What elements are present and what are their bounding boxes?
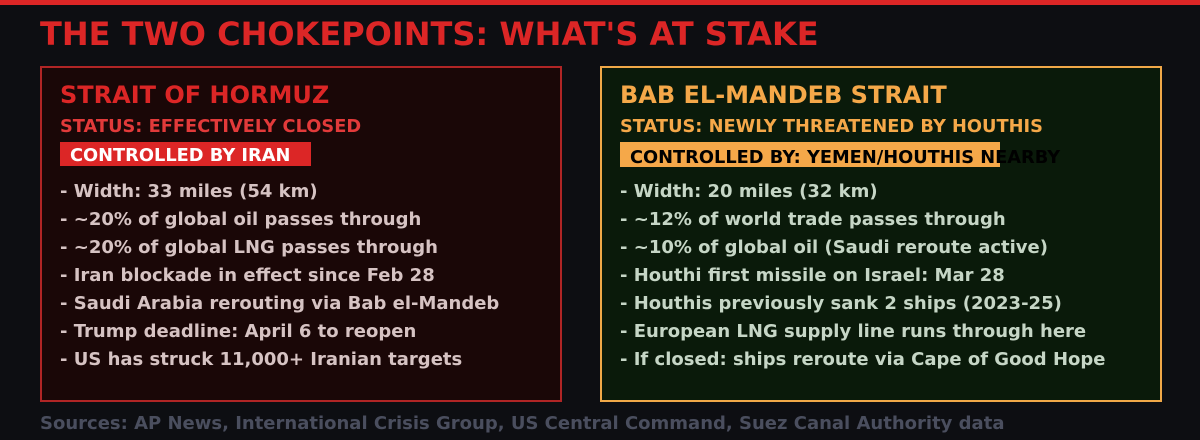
bullet list: Bab el-Mandeb facts — [620, 181, 1105, 370]
heading: Bab el-Mandeb: BAB EL-MANDEB STRAIT — [620, 81, 947, 109]
bullet list: Hormuz facts: - Trump deadline: April 6 to reopen — [60, 321, 416, 342]
bullet list: Bab el-Mandeb facts: - Houthis previously sank 2 ships (2023-25) — [620, 293, 1062, 314]
bullet list: Bab el-Mandeb facts: - If closed: ships reroute via Cape of Good Hope — [620, 349, 1105, 370]
panel: Bab el-Mandeb — [600, 66, 1162, 402]
bullet list: Hormuz facts: - Saudi Arabia rerouting via Bab el-Mandeb — [60, 293, 499, 314]
panel: Strait of Hormuz — [40, 66, 562, 402]
bullet list: Hormuz facts: - ~20% of global LNG passes through — [60, 237, 438, 258]
bullet list: Bab el-Mandeb facts: - ~12% of world trade passes through — [620, 209, 1006, 230]
bullet list: Hormuz facts: - US has struck 11,000+ Iranian targets — [60, 349, 462, 370]
top accent bar — [0, 0, 1200, 5]
bullet list: Bab el-Mandeb facts: - Houthi first missile on Israel: Mar 28 — [620, 265, 1005, 286]
panel: Bab el-Mandeb: CONTROLLED BY: YEMEN/HOUTHIS NEARBY — [630, 147, 1060, 168]
sources footer: Sources: AP News, International Crisis Group, US Central Command, Suez Canal Authority data — [40, 413, 1004, 434]
badge: controlled by Yemen/Houthis — [620, 142, 1000, 167]
bullet list: Hormuz facts — [60, 181, 499, 370]
bullet list: Bab el-Mandeb facts: - ~10% of global oil (Saudi reroute active) — [620, 237, 1048, 258]
badge: controlled by Iran: CONTROLLED BY IRAN — [70, 145, 290, 166]
bullet list: Hormuz facts: - Width: 33 miles (54 km) — [60, 181, 318, 202]
bullet list: Bab el-Mandeb facts: - European LNG supply line runs through here — [620, 321, 1086, 342]
heading: Hormuz: STRAIT OF HORMUZ — [60, 81, 329, 109]
bullet list: Hormuz facts: - Iran blockade in effect since Feb 28 — [60, 265, 435, 286]
title: THE TWO CHOKEPOINTS: WHAT'S AT STAKE — [40, 15, 819, 53]
bullet list: Hormuz facts: - ~20% of global oil passes through — [60, 209, 421, 230]
bullet list: Bab el-Mandeb facts: - Width: 20 miles (32 km) — [620, 181, 878, 202]
status: Bab el-Mandeb: STATUS: NEWLY THREATENED BY HOUTHIS — [620, 116, 1043, 137]
status: Hormuz: STATUS: EFFECTIVELY CLOSED — [60, 116, 361, 137]
